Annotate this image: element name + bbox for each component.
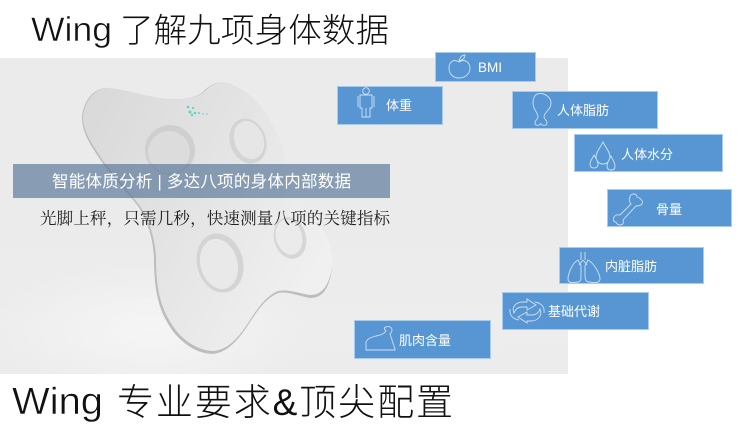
card: 内脏脂肪	[560, 248, 704, 284]
icon: water drops	[590, 142, 615, 170]
foot electrode: lower left	[190, 228, 250, 298]
banner: summary heading	[13, 164, 390, 198]
card: 基础代谢	[502, 292, 648, 330]
heading: bottom title: Wing	[12, 381, 103, 423]
icon: apple	[449, 55, 470, 78]
banner: summary heading: 智能体质分析 | 多达八项的身体内部数据	[52, 172, 351, 191]
icon: person	[358, 88, 374, 117]
icon: recycle arrows	[510, 299, 544, 323]
title: top heading: 了解九项身体数据	[120, 13, 389, 50]
card: 体重: 体重	[386, 98, 412, 113]
card: 骨量	[608, 190, 732, 226]
card: 人体脂肪: 人体脂肪	[557, 103, 609, 118]
title: top heading: Wing	[31, 11, 112, 49]
icon: muscle arm	[366, 327, 395, 350]
caption: measurement text: 光脚上秤，只需几秒，快速测量八项的关键指标	[40, 205, 390, 229]
foot electrode: upper left	[145, 125, 195, 175]
card: 体重	[338, 86, 442, 124]
product image: Wing body scale	[82, 82, 332, 354]
icon: lungs	[568, 252, 600, 283]
card: 肌肉含量	[354, 320, 490, 358]
card: 人体水分: 人体水分	[621, 147, 673, 162]
foot electrode: lower right	[269, 214, 311, 262]
card: 人体水分	[574, 134, 722, 172]
card: BMI	[436, 52, 536, 82]
card: 骨量: 骨量	[656, 202, 682, 217]
card: 肌肉含量: 肌肉含量	[399, 333, 451, 348]
icon: body fat drumstick	[533, 94, 551, 125]
scale logo	[187, 106, 208, 116]
heading: bottom title: 专业要求&顶尖配置	[117, 382, 453, 423]
card: 内脏脂肪: 内脏脂肪	[605, 259, 657, 274]
foot electrode: upper right	[223, 113, 273, 169]
icon: bone	[613, 194, 643, 225]
panel: product photo background	[0, 58, 568, 374]
card: 人体脂肪	[512, 92, 658, 128]
card: 基础代谢: 基础代谢	[548, 304, 600, 319]
card: BMI: BMI	[478, 60, 502, 75]
